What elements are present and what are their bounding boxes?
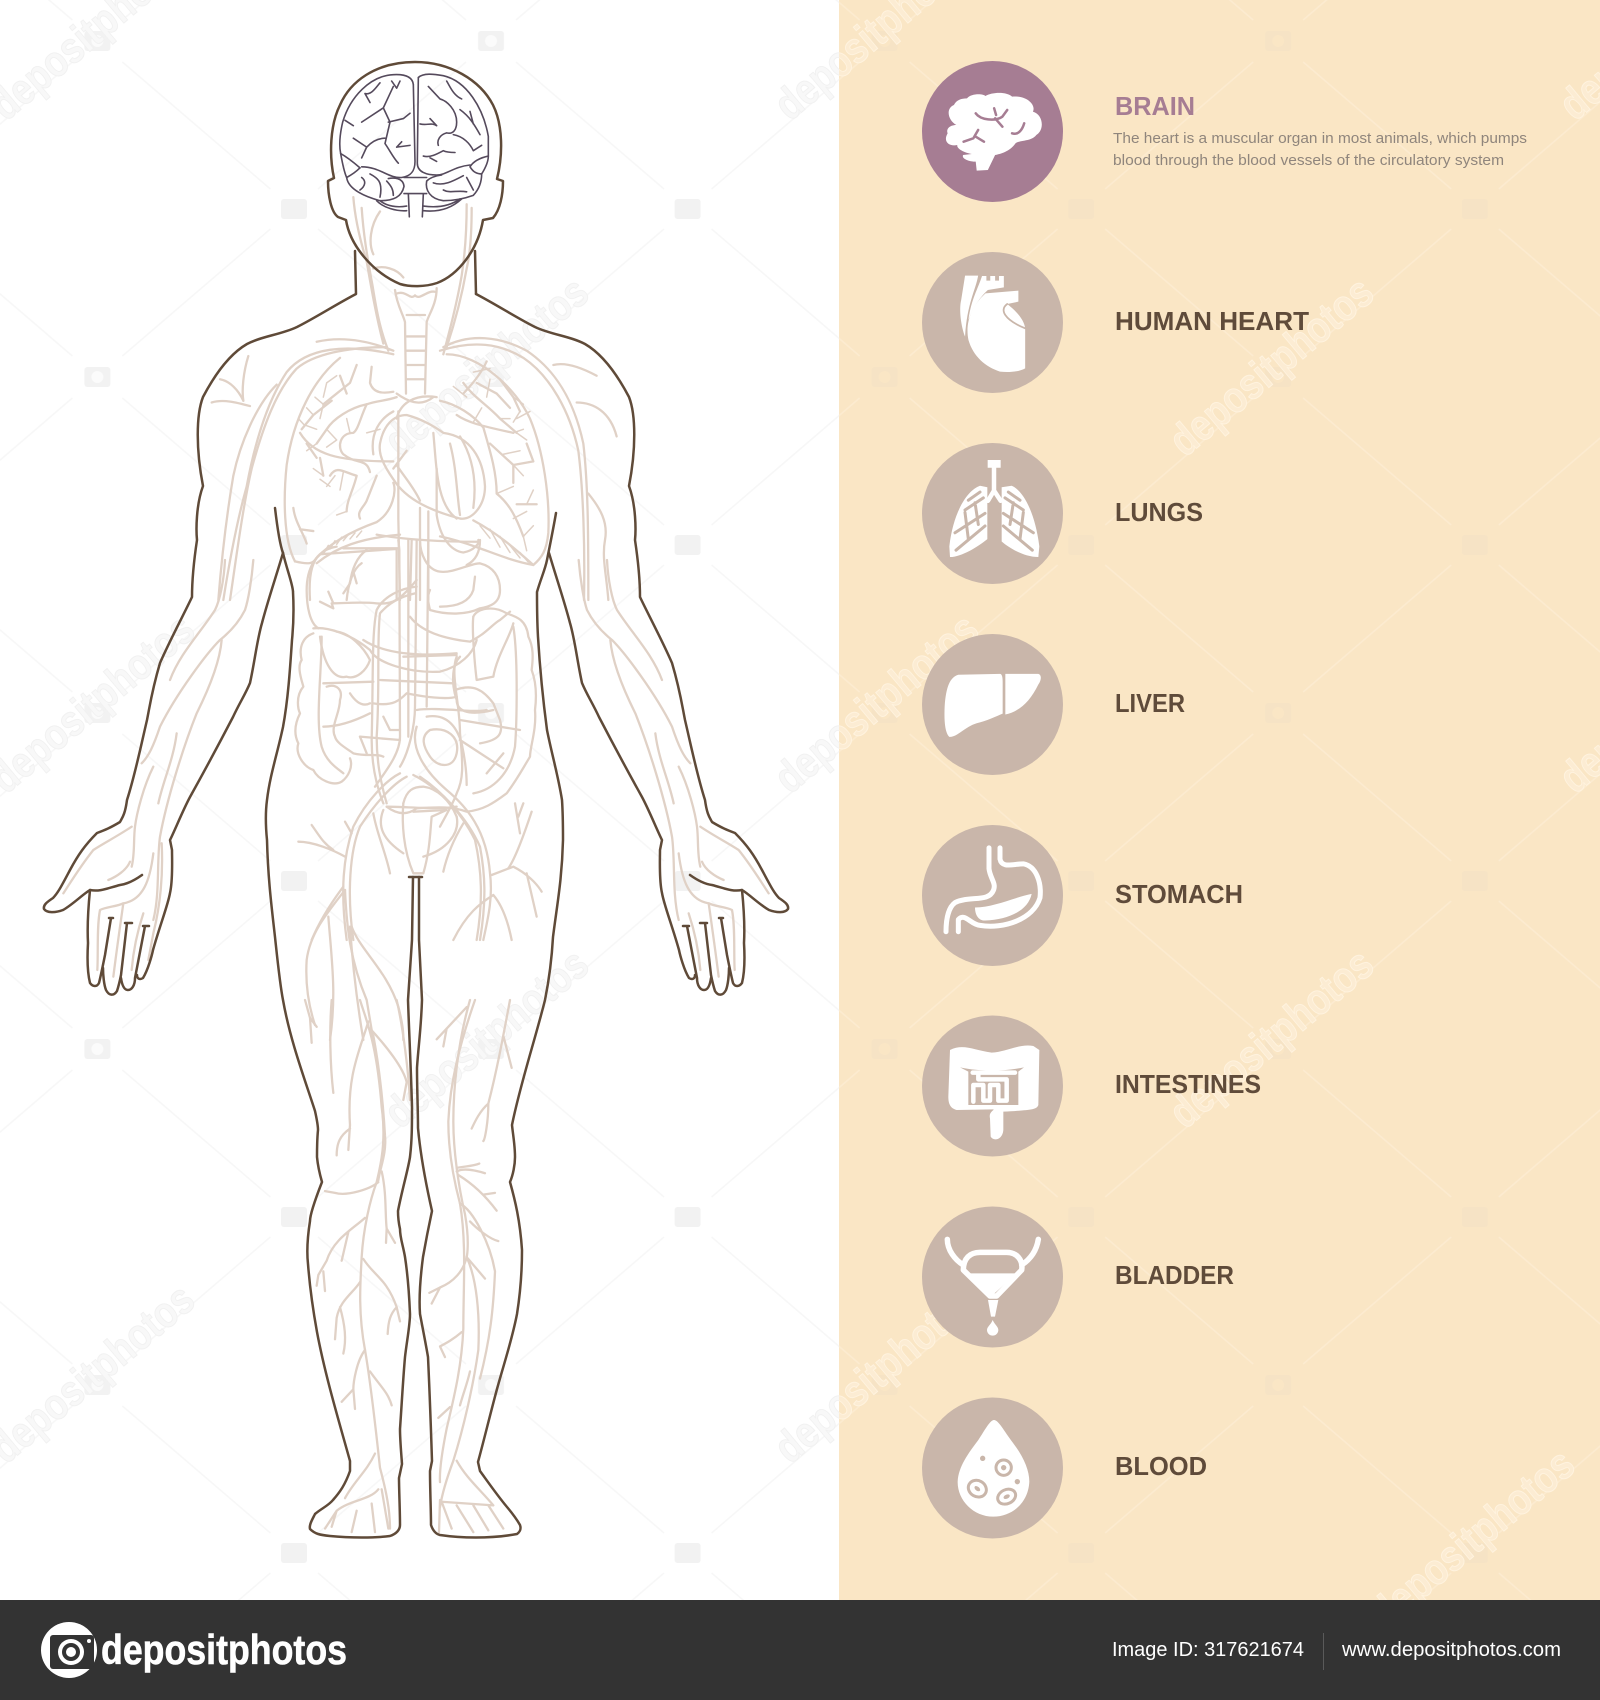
text: depositphotos xyxy=(765,604,988,803)
label: bladder: BLADDER xyxy=(1115,1260,1234,1290)
icon: intestines xyxy=(922,1016,1063,1156)
text: depositphotos xyxy=(1160,267,1383,466)
icon: lungs xyxy=(922,443,1063,584)
icon: stomach xyxy=(922,825,1063,966)
brain in the head xyxy=(340,74,488,217)
text: depositphotos xyxy=(375,267,598,466)
icon: heart xyxy=(922,252,1063,393)
logo: camera icon xyxy=(41,1622,97,1678)
human body anatomy illustration xyxy=(44,62,788,1538)
organ item: intestines xyxy=(922,1016,1261,1156)
website url: www.depositphotos.com xyxy=(1341,1639,1561,1661)
text: depositphotos xyxy=(765,1274,988,1473)
organ item: brain xyxy=(922,61,1527,202)
organ item: bladder xyxy=(922,1206,1234,1348)
description text: blood through the blood vessels of the circulatory system xyxy=(1113,152,1504,169)
organ item: liver xyxy=(922,634,1185,775)
text: depositphotos xyxy=(1160,939,1383,1138)
left thigh vessels xyxy=(306,890,403,1040)
description text: The heart is a muscular organ in most animals, which pumps xyxy=(1113,130,1527,147)
image id: Image ID: 317621674 xyxy=(1112,1639,1304,1661)
logo wordmark: depositphotos xyxy=(101,1626,347,1673)
panel: white body background xyxy=(0,0,839,1600)
panel: beige organ list background xyxy=(839,0,1600,1600)
footer bar xyxy=(0,1600,1600,1700)
organ item: lungs xyxy=(922,443,1203,584)
text: depositphotos xyxy=(765,604,988,803)
heading: brain: BRAIN xyxy=(1115,91,1195,121)
label: blood: BLOOD xyxy=(1115,1451,1207,1481)
organ item: blood xyxy=(922,1398,1207,1538)
icon: liver xyxy=(922,634,1063,775)
icon: brain xyxy=(922,61,1063,202)
icon: bladder xyxy=(922,1206,1063,1348)
left arm vessels xyxy=(63,560,253,977)
organ item: human heart xyxy=(922,252,1309,393)
vessels and organs of abdomen and pelvis xyxy=(295,540,542,940)
label: liver: LIVER xyxy=(1115,688,1185,718)
description text xyxy=(1113,130,1527,169)
fine bronchial branches of the lungs xyxy=(298,369,533,562)
vessels and organs of head and chest xyxy=(212,197,617,600)
icon: blood drop xyxy=(922,1398,1063,1538)
label: stomach: STOMACH xyxy=(1115,879,1243,909)
text: depositphotos xyxy=(765,1274,988,1473)
right arm vessels xyxy=(579,560,769,977)
label: lungs: LUNGS xyxy=(1115,497,1203,527)
text: depositphotos xyxy=(375,939,598,1138)
label: intestines: INTESTINES xyxy=(1115,1069,1261,1099)
organ item: stomach xyxy=(922,825,1243,966)
label: human heart: HUMAN HEART xyxy=(1115,306,1309,336)
leg vessels xyxy=(305,1000,512,1532)
body outline xyxy=(44,62,788,1538)
